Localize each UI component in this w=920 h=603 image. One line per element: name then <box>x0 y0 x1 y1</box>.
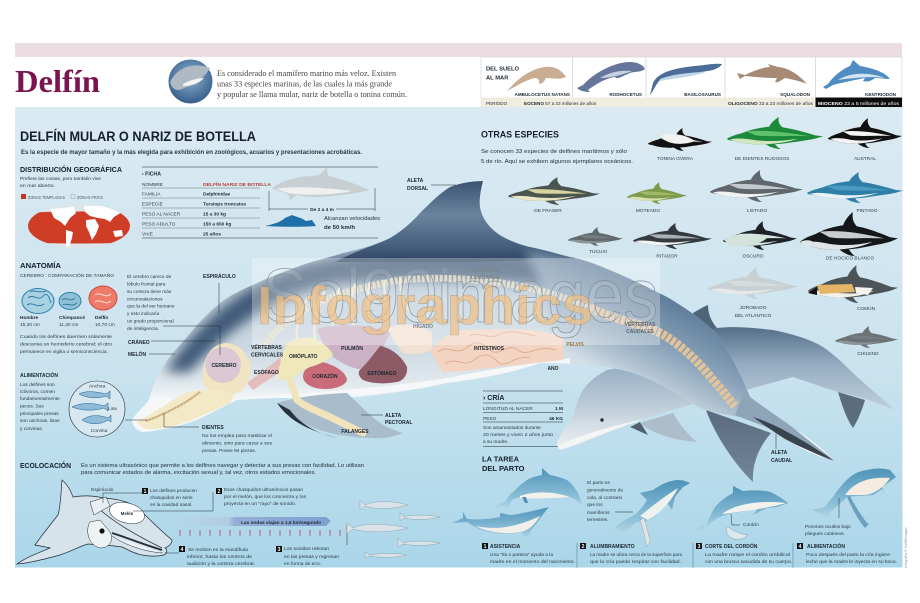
species: ritador: RITADOR <box>656 254 678 260</box>
ambulocetus: AMBULOCETUS NATANS <box>515 92 570 97</box>
species: de dientes rugosos: DE DIENTES RUGOSOS <box>735 156 789 162</box>
species: austral <box>828 118 902 162</box>
panel: cría: › CRÍA <box>483 393 504 402</box>
pectoral dark crescent <box>277 403 337 438</box>
rear lower jaw <box>558 419 645 450</box>
panel: alimentación: son anchoas, lisas <box>20 418 60 424</box>
echolocation dolphin: Melón <box>121 511 134 516</box>
step 3: con una brusca sacudida de su cuerpo. <box>705 559 792 565</box>
brain paragraph <box>127 274 175 332</box>
species: oscuro: OSCURO <box>742 254 764 260</box>
title: Delfín <box>15 63 100 99</box>
species: pintado: PINTADO <box>857 208 878 214</box>
panel: ficha: › FICHA <box>142 172 161 178</box>
species: común <box>808 265 898 312</box>
anatomy labels: CERVICALES <box>251 352 284 358</box>
panel: cría: 46 KG <box>549 416 563 422</box>
timeline: del suelo al mar: EOCENO 57 a 33 millones de años <box>524 101 597 106</box>
step 1: 1 <box>484 544 487 550</box>
liver <box>388 325 432 354</box>
panel: anatomía: descansa un hemisferio cerebral; el otro <box>20 342 112 348</box>
chimp brain: Chimpancé <box>59 315 85 321</box>
anatomy labels: OMÓPLATO <box>289 352 318 360</box>
anatomy labels: PELVIS <box>566 342 584 348</box>
species: chileno <box>835 326 898 357</box>
rear dorsal fin <box>693 305 717 334</box>
dolphin brain: 10,70 cm <box>95 322 115 328</box>
stomach <box>359 346 407 383</box>
world map <box>25 204 133 248</box>
chimp brain <box>59 292 85 328</box>
species: listado: LISTADO <box>747 208 767 214</box>
panel: ecolocación: para comunicar estados de alarma, excitación sexual y, tal vez, otros estados emocionales. <box>81 470 316 476</box>
belly highlight <box>237 358 570 401</box>
species: tonina overa: TONINA OVERA <box>657 156 694 162</box>
brain paragraph: circunvalaciones <box>127 296 163 302</box>
panel: ficha: DELFÍN NARIZ DE BOTELLA <box>203 180 272 188</box>
panel: alimentación: Los delfines son <box>20 382 55 388</box>
rear pectoral small <box>630 422 648 435</box>
panel: ficha <box>142 167 380 238</box>
basilosaurus <box>650 64 722 97</box>
panel: ecolocación: en la cavidad nasal. <box>150 502 192 508</box>
step 4: leche que la madre le inyecta en su boca. <box>806 559 897 565</box>
panel: ecolocación: Es un sistema ultrasónico que permite a los delfines navegar y detectar a sus presas con facilidad. Lo utilizan <box>81 463 364 469</box>
birth dolphins 1 <box>452 468 582 540</box>
panel: la tarea del parto: Cordón <box>743 522 759 528</box>
step 1 <box>482 543 575 565</box>
species: tucuxi: TUCUXI <box>589 249 607 255</box>
main blue panel <box>15 107 902 568</box>
panel: distribución geográfica <box>20 165 133 248</box>
panel: cría: 1 M <box>555 406 563 412</box>
species: moteado: MOTEADO <box>636 208 660 214</box>
panel: ecolocación: proyecta en un "rayo" de sonido. <box>224 501 296 507</box>
panel: alimentación: y corvinas. <box>20 426 43 432</box>
panel: alimentación: Anchoa <box>89 384 105 390</box>
species: de fraser: DE FRASER <box>534 208 562 214</box>
intro photo: dolphin in circle <box>168 60 212 104</box>
brain paragraph: un grado proporcional <box>127 318 174 324</box>
pectoral fin <box>277 393 403 438</box>
panel: la tarea del parto: Pezones ocultos bajo <box>805 524 851 530</box>
panel: cría: LONGITUD AL NACER <box>483 406 533 412</box>
tail stock <box>525 250 800 450</box>
intro text: y popular se llama mular, nariz de botella o tonina común. <box>217 90 407 99</box>
species: tonina overa <box>648 128 712 162</box>
panel: distribución geográfica: en mar abierto. <box>20 183 55 189</box>
panel: otras especies heading <box>481 130 633 165</box>
panel: la tarea del parto: pliegues cutáneos. <box>805 531 845 537</box>
anatomy labels: LUMBARES <box>471 275 500 281</box>
credit: Infografía © Sol90images <box>904 527 908 568</box>
panel: ficha: VIVE <box>142 232 153 238</box>
step 3 <box>696 542 792 565</box>
brain paragraph: El cerebro carece de <box>127 274 172 280</box>
species: chileno: CHILENO <box>857 351 879 357</box>
squalodon: SQUALODON <box>780 92 811 97</box>
panel: ficha: Delphinidae <box>203 192 231 198</box>
intro text <box>217 69 407 99</box>
step 3: 3 <box>698 544 701 550</box>
panel: ecolocación: 2 <box>218 489 221 495</box>
panel: ficha: Alcanzan velocidades <box>324 216 380 222</box>
panel: alimentación: principales presas <box>20 411 59 417</box>
spine <box>265 278 590 345</box>
birth dolphin 3 <box>692 486 788 540</box>
watermark: orange word: Infographics <box>257 276 593 336</box>
panel: anatomía: MELÓN <box>128 350 146 358</box>
ambulocetus <box>507 67 570 97</box>
panel: ficha: Tursiops truncatus <box>203 202 246 208</box>
panel: alimentación: Corvina <box>91 428 108 434</box>
gray dolphin size <box>272 167 370 200</box>
anatomy labels: ESTÓMAGO <box>367 369 397 377</box>
timeline: del suelo al mar: MIOCENO 23 a 5 millones de años <box>818 101 900 106</box>
panel: anatomía <box>20 261 236 358</box>
intro text: unas 33 especies marinas, de las cuales la más grande <box>217 80 392 88</box>
step 4: 4 <box>799 544 802 550</box>
callout: dientes: No los emplea para masticar el <box>202 433 272 439</box>
dolphin brain: Delfín <box>95 315 108 321</box>
panel: ecolocación: en forma de eco. <box>284 561 321 567</box>
brain paragraph: su corteza tiene más <box>127 289 172 295</box>
subtitle: Es la especie de mayor tamaño y la más elegida para exhibición en zoológicos, acuarios y presentaciones acrobáticas. <box>21 150 362 156</box>
panel: ficha: 15 a 30 kg <box>203 212 226 218</box>
birth dolphin 2 <box>608 480 690 547</box>
callout: dientes: DIENTES <box>202 425 224 431</box>
panel: alimentación: ictívoros, comen <box>20 389 55 395</box>
species: jorobado del atlántico: DEL ATLÁNTICO <box>735 312 772 319</box>
anatomy labels: VÉRTEBRAS <box>470 266 501 274</box>
fish school <box>347 500 440 558</box>
panel: ecolocación: Las ondas viajan a 1,5 km/segundo <box>241 520 321 525</box>
panel: cría: Son amamantados durante <box>483 425 541 431</box>
step 3: CORTE DEL CORDÓN <box>705 542 758 550</box>
panel: ficha: 150 a 650 kg <box>203 222 231 228</box>
panel: alimentación: fundamentalmente <box>20 396 60 402</box>
panel: cría <box>483 391 563 446</box>
panel: ecolocación: Se reciben en la mandíbula <box>188 547 248 553</box>
pink top band <box>15 43 902 57</box>
panel: cría: 20 meses y viven 2 años junto <box>483 432 553 438</box>
species: tucuxi <box>568 227 623 255</box>
step 4 <box>797 542 897 565</box>
tail fluke dark <box>706 410 771 482</box>
tail tip <box>735 392 835 461</box>
timeline: del suelo al mar: PERÍODO <box>486 100 508 106</box>
species: de hocico blanco: DE HOCICO BLANCO <box>826 256 874 262</box>
teeth <box>146 392 200 421</box>
step 4: Poco después del parto la cría ingiere <box>806 552 890 558</box>
panel: alimentación: ALIMENTACIÓN <box>20 371 58 379</box>
back shadow <box>165 249 600 372</box>
panel: cría: PESO <box>483 416 497 422</box>
callout: dientes <box>164 413 273 454</box>
panel: la tarea del parto <box>452 454 897 568</box>
rodhocetus: RODHOCETUS <box>609 92 642 97</box>
anatomy labels: CORAZÓN <box>312 372 338 380</box>
brain paragraph: y esto indicaría <box>127 311 160 317</box>
panel: distribución geográfica: ZONAS FRÍAS <box>77 195 103 200</box>
panel: la tarea del parto: El parto es <box>587 480 611 486</box>
species: jorobado del atlántico: JOROBADO <box>740 305 767 311</box>
step 2 <box>580 543 682 565</box>
species: de fraser <box>508 177 600 214</box>
anatomy labels: CAUDALES <box>626 329 655 335</box>
squalodon <box>737 64 811 97</box>
birth dolphin 4 <box>812 468 896 528</box>
species: de dientes rugosos <box>727 117 823 162</box>
anatomy labels: ANO <box>547 366 559 372</box>
callout: dientes: alimento, sino para cazar a sus <box>202 440 273 446</box>
panel: ficha: De 2 a 4 m <box>310 207 334 213</box>
species: listado <box>710 170 803 214</box>
panel: ecolocación: Espiráculo <box>91 487 114 493</box>
clipped body shading <box>165 181 840 465</box>
panel: distribución geográfica: ZONAS TEMPLADAS <box>28 195 65 200</box>
panel: la tarea del parto: generalmente de <box>587 488 623 494</box>
human brain <box>20 288 54 328</box>
rodhocetus <box>577 62 645 97</box>
main heading: DELFÍN MULAR O NARIZ DE BOTELLA <box>20 129 256 144</box>
scapula <box>277 338 333 380</box>
skull <box>202 343 251 398</box>
timeline: del suelo al mar <box>481 57 902 107</box>
basilosaurus: BASILOSAURUS <box>684 92 721 97</box>
panel: distribución geográfica: DISTRIBUCIÓN GEOGRÁFICA <box>20 165 122 174</box>
rear eye <box>600 418 604 422</box>
anatomy labels: INTESTINOS <box>474 346 505 352</box>
ribs <box>297 279 410 345</box>
anatomy labels: VÉRTEBRAS <box>251 343 283 351</box>
main dolphin <box>132 181 840 482</box>
species: pintado <box>807 172 903 214</box>
prey circle <box>69 381 125 437</box>
step 1: ASISTENCIA <box>490 544 521 550</box>
panel: ecolocación: chasquidos en serie <box>150 495 193 501</box>
heart <box>303 362 347 389</box>
human brain: Hombre <box>20 315 38 321</box>
step 1: Una "tía o partera" ayuda a la <box>490 552 553 558</box>
panel: ecolocación <box>17 461 440 567</box>
panel: ecolocación: 4 <box>181 547 184 553</box>
callout: dientes: presas. Posee 94 piezas. <box>202 448 256 454</box>
sound arrow <box>155 517 331 526</box>
panel: anatomía: ANATOMÍA <box>20 261 62 270</box>
kentriodon <box>823 60 897 97</box>
panel: la tarea del parto: DEL PARTO <box>482 464 525 473</box>
species: austral: AUSTRAL <box>854 156 876 162</box>
timeline: del suelo al mar: AL MAR <box>486 76 509 82</box>
step 2: ALUMBRAMIENTO <box>590 544 635 550</box>
anatomy labels: HÍGADO <box>413 322 433 330</box>
panel: anatomía: ESPIRÁCULO <box>203 273 236 280</box>
panel: ficha: ESPECIE <box>142 202 163 208</box>
rear dolphin <box>557 305 895 450</box>
panel: la tarea del parto: cola, al contrario <box>587 495 623 501</box>
chimp brain: 11,30 cm <box>59 322 78 328</box>
beak bone <box>137 390 233 429</box>
panel: alimentación <box>20 371 147 437</box>
panel: ficha: NOMBRE <box>142 182 163 188</box>
panel: ecolocación: audición y la corteza cerebral. <box>187 561 255 567</box>
panel: alimentación: peces. Sus <box>20 404 44 410</box>
panel: la tarea del parto: mamíferos <box>587 510 610 516</box>
step 3: La madre rompe el cordón umbilical <box>705 552 790 558</box>
panel: ecolocación: ECOLOCACIÓN <box>20 461 71 470</box>
panel: ecolocación: por el melón, que los concentra y los <box>224 494 307 500</box>
caudal vertebrae <box>590 308 735 406</box>
step 4: ALIMENTACIÓN <box>807 542 845 550</box>
brain paragraph: que la del ser humano <box>127 304 175 310</box>
panel: la tarea del parto: terrestres. <box>587 517 609 523</box>
human brain: 15,30 cm <box>20 322 40 328</box>
panel: ficha: FAMILIA <box>142 192 161 198</box>
species: común: COMÚN <box>857 305 876 312</box>
dolphin brain <box>89 286 117 328</box>
panel: ecolocación: inferior, hasta los centros de <box>187 554 252 560</box>
panel: anatomía: CRÁNEO <box>128 339 150 346</box>
step 2: que la cría pueda respirar con facilidad. <box>590 559 681 565</box>
anatomy labels: ESÓFAGO <box>254 368 279 376</box>
step 2: La madre se ubica cerca de la superficie para <box>590 552 682 558</box>
panel: ecolocación: Esos chasquidos ultrasónicos pasan <box>224 487 303 493</box>
panel: ficha: PESO ADULTO <box>142 222 176 228</box>
anatomy labels: CAUDAL <box>771 458 792 464</box>
main body <box>132 181 835 461</box>
panel: ficha: 25 años <box>203 232 221 238</box>
returning sound ticks <box>180 530 340 536</box>
panel: ecolocación: 3 <box>278 547 281 553</box>
panel: distribución geográfica: Prefiere las costas, pero también vive <box>20 176 101 182</box>
anatomy labels: PECTORAL <box>385 420 412 426</box>
brain <box>205 347 241 383</box>
pectoral bones <box>290 380 363 433</box>
species: jorobado del atlántico <box>708 267 798 319</box>
panel: ecolocación: Los sonidos rebotan <box>284 546 329 552</box>
panel: ficha: PESO AL NACER <box>142 212 181 218</box>
anatomy labels: ALETA <box>407 178 424 184</box>
step 1: madre en el momento del nacimiento. <box>490 559 575 565</box>
watermark: light plate <box>252 258 660 345</box>
rear body <box>557 327 895 450</box>
panel: la tarea del parto: que los <box>587 502 603 508</box>
panel: cría: a su madre. <box>483 439 508 445</box>
dorsal fin <box>335 181 575 262</box>
anatomy labels: ALETA <box>385 413 402 419</box>
brain paragraph: de inteligencia. <box>127 326 159 332</box>
anatomy labels <box>211 178 792 464</box>
rear fluke <box>838 392 865 428</box>
panel: la tarea del parto: LA TAREA <box>482 454 520 464</box>
echolocation dolphin <box>17 480 172 564</box>
leaping blue silhouette <box>265 215 316 227</box>
intro text: Es considerado el mamífero marino más veloz. Existen <box>217 69 396 78</box>
panel: ecolocación: en las presas y regresan <box>284 554 339 560</box>
panel: anatomía: Cuando los delfines duermen solamente <box>20 334 112 340</box>
panel: ecolocación: 1 <box>144 489 147 495</box>
oesophagus <box>247 358 286 390</box>
species: ritador <box>633 223 712 260</box>
rear pectoral fin <box>640 413 697 442</box>
timeline: del suelo al mar: OLIGOCENO 33 a 23 millones de años <box>728 101 814 106</box>
kentriodon: KENTRIODON <box>865 92 897 97</box>
species: de hocico blanco <box>800 212 898 262</box>
anatomy labels: ALETA <box>771 450 788 456</box>
step 2: 2 <box>582 544 585 550</box>
panel: ficha: de 50 km/h <box>324 225 355 231</box>
panel: anatomía: permanece en vigilia o semiconsciencia. <box>20 349 108 355</box>
panel: alimentación: Lisa <box>108 406 117 412</box>
species: oscuro <box>723 221 797 260</box>
anatomy labels: FALANGES <box>341 429 369 435</box>
timeline: del suelo al mar: DEL SUELO <box>486 66 520 72</box>
anatomy labels: PULMÓN <box>341 344 363 352</box>
tail dark underside <box>753 417 833 460</box>
panel: ecolocación: Los delfines producen <box>150 488 197 494</box>
intestines <box>430 329 563 372</box>
panel: otras especies heading: OTRAS ESPECIES <box>481 130 559 140</box>
brain paragraph: lóbulo frontal para <box>127 282 166 288</box>
anatomy labels: DORSAL <box>407 186 428 192</box>
panel: anatomía: CEREBRO : COMPARACIÓN DE TAMAÑO <box>20 272 114 279</box>
panel: otras especies heading: Se conocen 33 especies de delfines marítimos y sólo <box>481 149 627 155</box>
anatomy labels: VÉRTEBRAS <box>625 320 656 328</box>
species: moteado <box>627 182 687 214</box>
panel: otras especies heading: 5 de río. Aquí se exhiben algunos ejemplares oceánicos. <box>481 159 633 165</box>
lung <box>317 325 390 370</box>
watermark: outlined logotype: Sol90images <box>262 254 658 339</box>
anatomy labels: CEREBRO <box>211 363 237 369</box>
